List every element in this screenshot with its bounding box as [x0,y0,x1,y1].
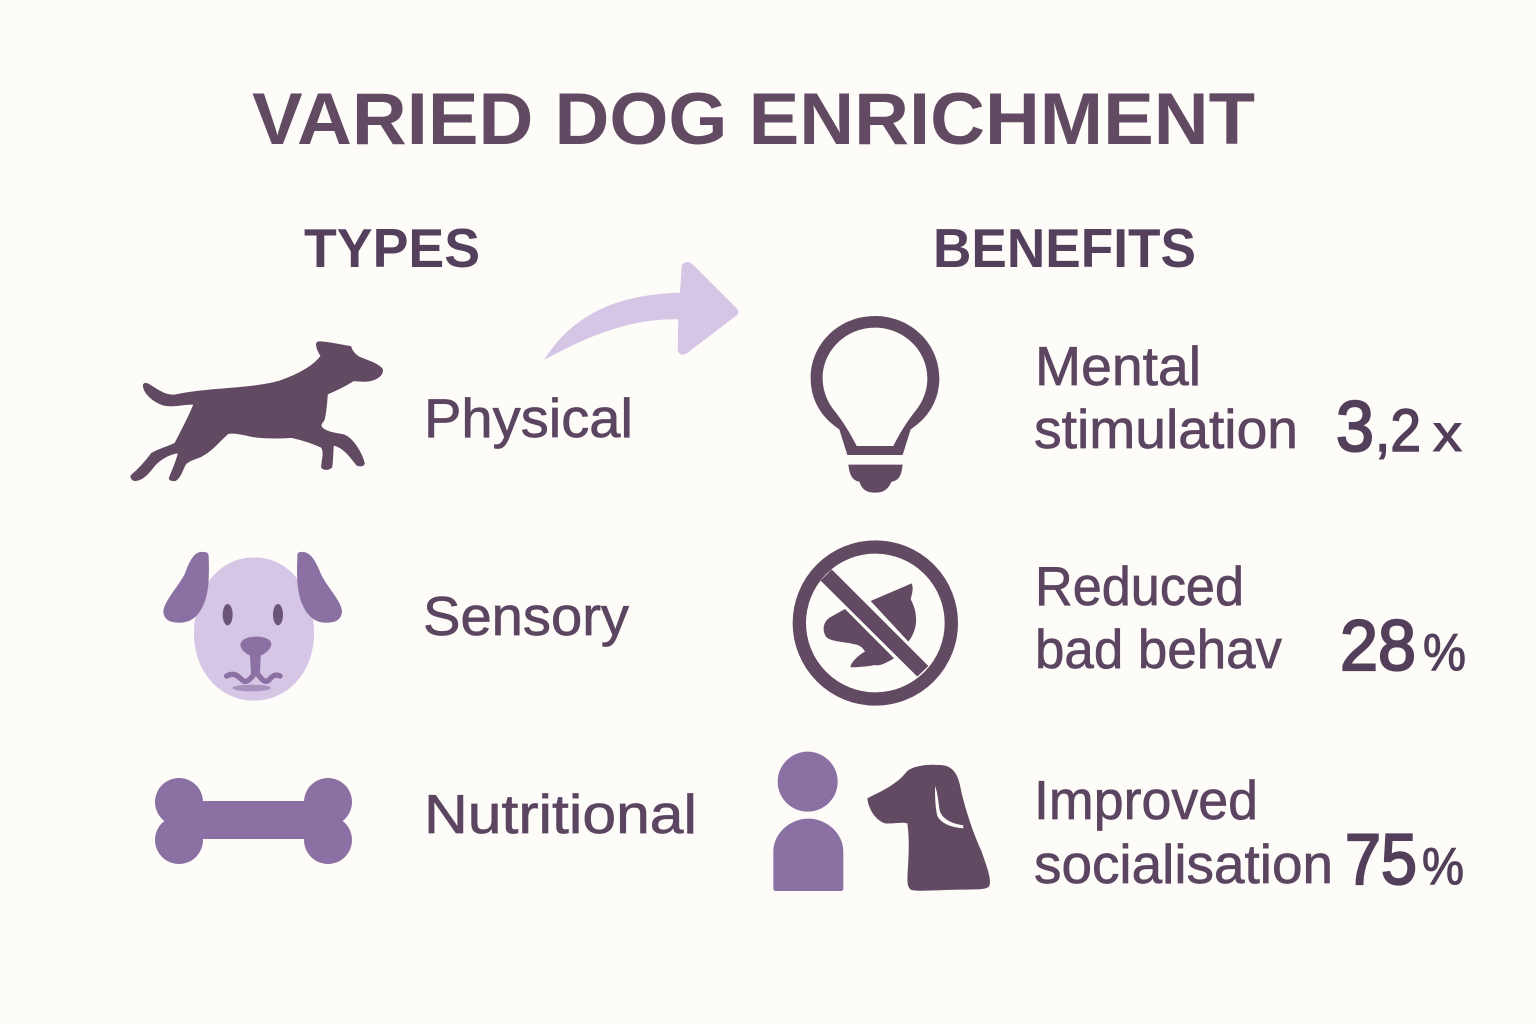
icon: dog face [163,552,342,701]
stat: 3,2 x: ,2 [1375,397,1421,464]
label: improved socialisation [1034,769,1333,895]
panel: benefits [773,316,1466,900]
label: sensory: Sensory [423,585,630,647]
heading: types: TYPES [304,217,480,279]
icon: bone [155,778,352,864]
label: mental stimulation: stimulation [1034,398,1298,460]
label: nutritional: Nutritional [424,783,697,845]
stat: 3,2 x [1336,388,1462,467]
stat: 28%: 28 [1340,607,1416,686]
icon: no bad behaviour [799,547,951,699]
icon: person and dog [773,752,990,891]
stat: 3,2 x: 3 [1336,388,1374,467]
title: VARIED DOG ENRICHMENT [252,79,1255,160]
icon: light bulb [811,316,939,493]
label: reduced bad behav: Reduced [1035,555,1244,617]
label: reduced bad behav [1035,555,1282,680]
stat: 3,2 x: x [1433,405,1462,463]
arrow: types to benefits [544,262,738,360]
label: physical: Physical [424,387,633,449]
label: improved socialisation: socialisation [1034,833,1333,895]
stat: 28% [1340,607,1466,686]
label: mental stimulation [1034,335,1298,460]
stat: 28%: % [1423,624,1466,682]
stat: 75% [1345,821,1464,900]
label: mental stimulation: Mental [1035,335,1201,397]
label: improved socialisation: Improved [1034,769,1258,831]
stat: 75%: 75 [1345,821,1417,900]
stat: 75%: % [1422,838,1464,896]
icon: running dog [131,342,382,481]
panel: types [131,342,697,864]
label: reduced bad behav: bad behav [1035,618,1282,680]
heading: benefits: BENEFITS [933,217,1196,279]
